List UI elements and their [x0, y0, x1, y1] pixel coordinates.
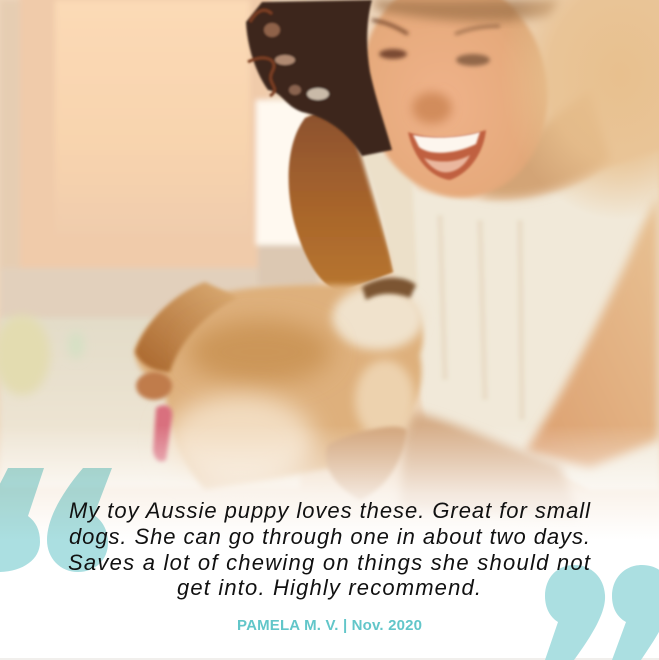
- hair: [246, 0, 392, 156]
- lower arm reaching to puppy: [400, 410, 580, 520]
- floor reflections: [0, 315, 84, 395]
- curls: [248, 10, 275, 96]
- neck: [480, 90, 610, 198]
- hand under puppy: [136, 372, 172, 400]
- quote text: My toy Aussie puppy loves these. Great for small: [69, 498, 591, 523]
- top-right glow: [500, 0, 659, 220]
- puppy: [135, 278, 424, 500]
- face: [342, 0, 568, 215]
- quote text: get into. Highly recommend.: [177, 575, 481, 600]
- quote text: [68, 498, 591, 600]
- quote text: Saves a lot of chewing on things she should not: [68, 550, 591, 575]
- forehead shadow: [372, 0, 560, 22]
- white fade: [0, 425, 659, 540]
- eyes and brows: [372, 20, 500, 66]
- background room: [0, 0, 320, 488]
- mouth: [408, 130, 486, 180]
- quote text: dogs. She can go through one in about two days.: [69, 524, 590, 549]
- nose: [412, 92, 452, 124]
- attribution: PAMELA M. V. | Nov. 2020: [237, 617, 422, 634]
- shirt: [356, 140, 659, 490]
- closing quote mark: [545, 565, 659, 660]
- right forearm: [525, 195, 659, 468]
- opening quote mark: [0, 468, 112, 572]
- tongue: [153, 405, 172, 462]
- upper arm: [289, 105, 394, 292]
- puppy ear: [135, 282, 238, 372]
